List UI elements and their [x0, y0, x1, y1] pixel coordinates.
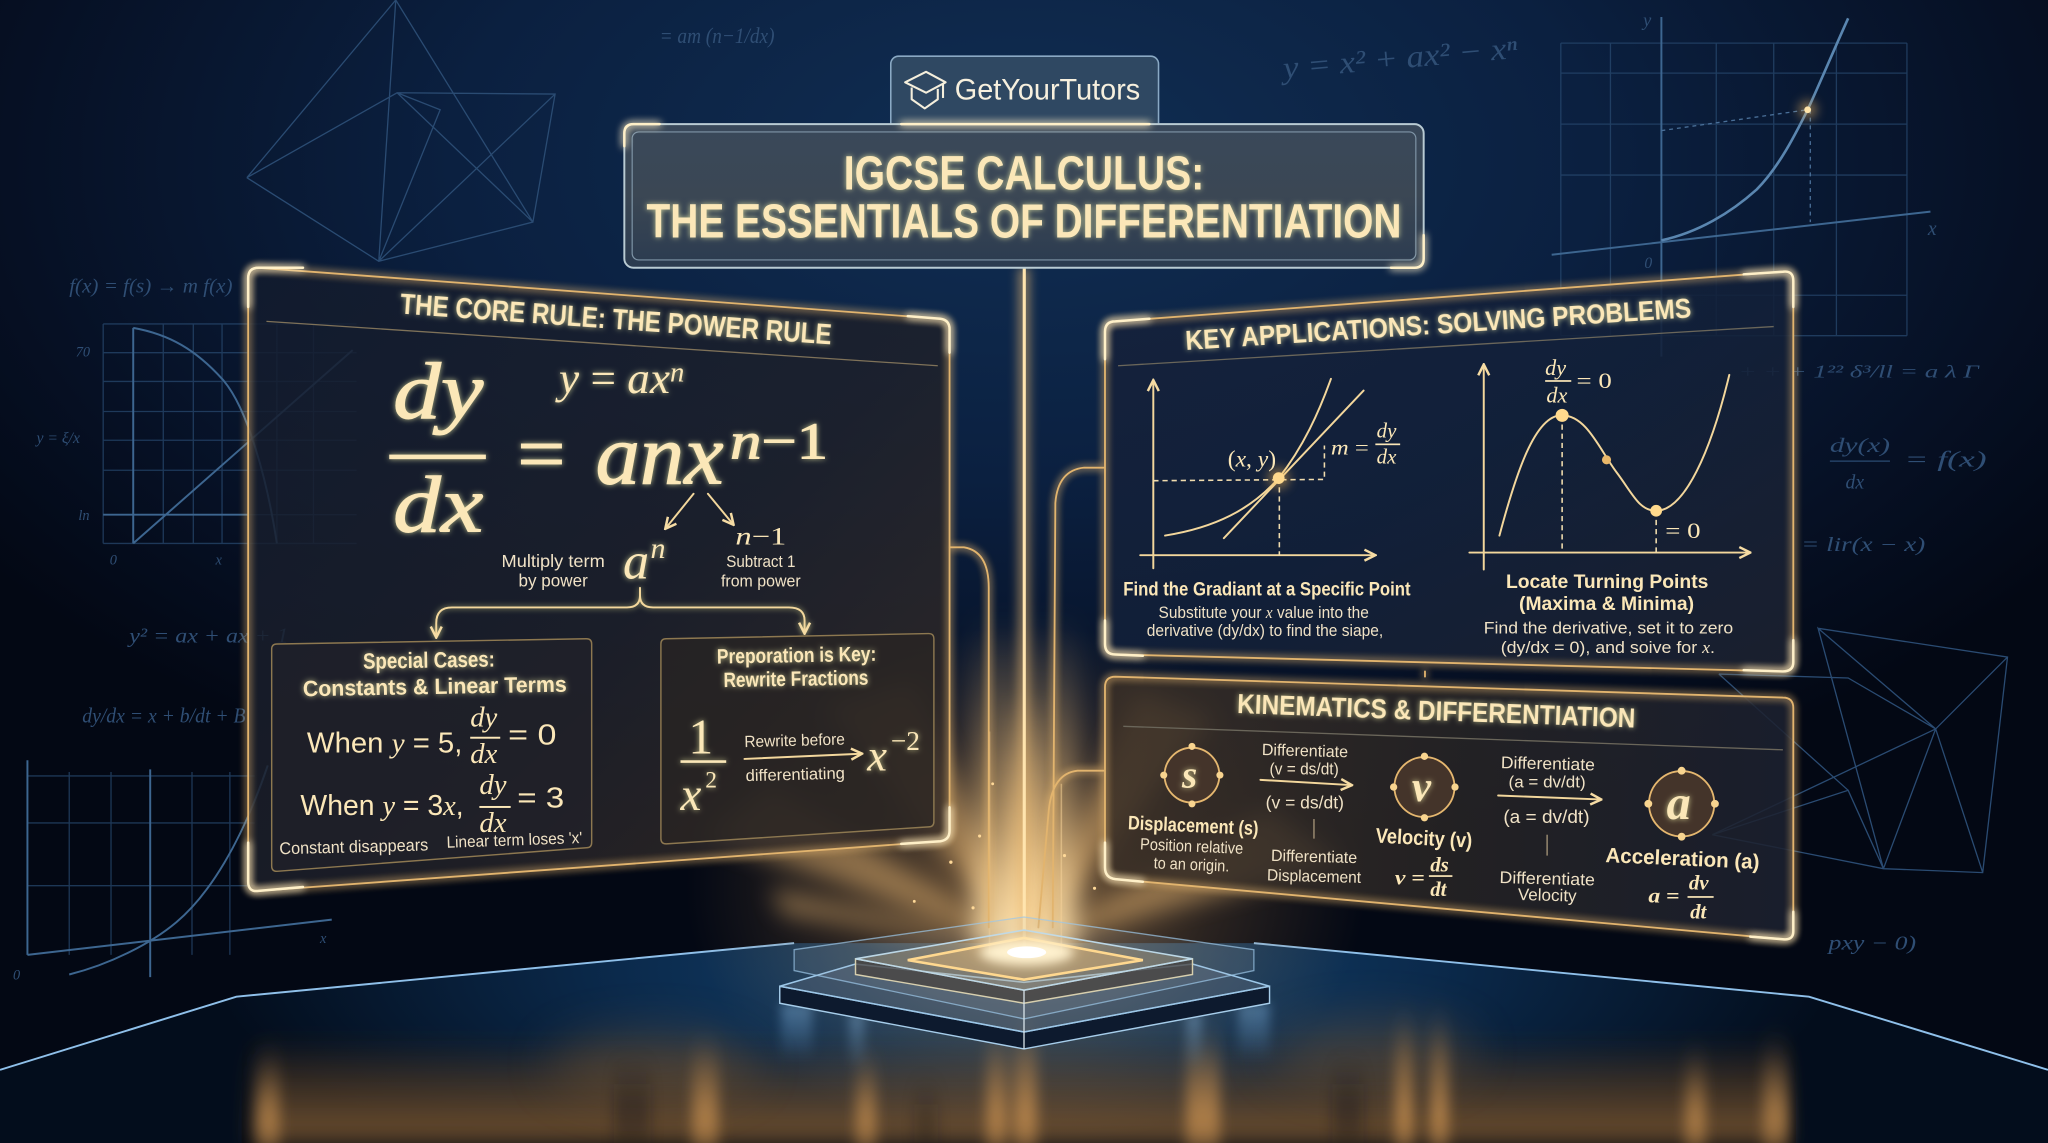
- breakdown arrows: [666, 494, 733, 528]
- a to the n: a: [623, 533, 649, 591]
- acceleration label: dt: [1690, 899, 1708, 923]
- velocity label: [1375, 825, 1473, 901]
- displacement label: Position relative: [1140, 835, 1244, 858]
- turning points caption: (Maxima & Minima): [1519, 594, 1694, 615]
- heading: kinematics: KINEMATICS & DIFFERENTIATION: [1237, 688, 1636, 734]
- acceleration label: a =: [1648, 884, 1680, 908]
- arrow: s to v: [1260, 741, 1362, 887]
- sub panel: rewrite fractions: Rewrite before: [744, 731, 845, 751]
- chart: turning points: [1469, 355, 1749, 570]
- acceleration label: Acceleration (a): [1605, 844, 1760, 874]
- main formula: n−1: [730, 413, 828, 471]
- subtract note: from power: [721, 573, 801, 591]
- sub panel: rewrite fractions: Preporation is Key:: [717, 643, 876, 669]
- floor reflections: [242, 1003, 1796, 1143]
- right formulas: + + + 1²² δ³/ll = a λ Γ: [1738, 362, 1980, 382]
- sub panel: rewrite fractions: 1: [688, 710, 713, 765]
- icon: velocity: [1390, 753, 1459, 821]
- chart: turning points: = 0: [1576, 368, 1612, 393]
- velocity label: v =: [1395, 865, 1425, 889]
- particles: [913, 782, 1096, 909]
- arrow: s to v: (v = ds/dt): [1266, 793, 1344, 813]
- turning points caption: (dy/dx = 0), and soive for x.: [1501, 638, 1715, 657]
- chart: turning points: = 0: [1665, 518, 1701, 543]
- heading: key applications: KEY APPLICATIONS: SOLVING PROBLEMS: [1184, 292, 1692, 356]
- arrow: v to a: (a = dv/dt): [1509, 773, 1586, 792]
- sub panel: rewrite fractions: [661, 634, 934, 844]
- base plate: [780, 986, 1270, 1049]
- icon: displacement: [1160, 743, 1223, 807]
- background math decorations: y = ξ/x: [35, 430, 80, 447]
- icon: acceleration: a: [1667, 777, 1691, 830]
- logo tab: [891, 56, 1159, 132]
- central connector line: [989, 268, 1062, 954]
- brand name: GetYourTutors: [955, 73, 1140, 106]
- when y equals 5: When y = 5,: [307, 727, 462, 759]
- when y equals 3x: When y = 3x,: [300, 790, 464, 822]
- main formula: y = ax: [555, 353, 670, 403]
- background math decorations: x: [215, 552, 223, 568]
- when y equals 3x: [300, 769, 564, 839]
- turning points caption: [1484, 572, 1733, 657]
- rewrite arrow: [744, 754, 861, 759]
- when y equals 3x: dx: [479, 807, 507, 839]
- arrow: s to v: Differentiate: [1271, 847, 1357, 867]
- a to the n: [623, 532, 665, 591]
- sub panel: rewrite fractions: Rewrite Fractions: [723, 667, 869, 692]
- turning points caption: Locate Turning Points: [1506, 572, 1708, 593]
- displacement label: to an origin.: [1153, 854, 1230, 876]
- background math decorations: f(x) = f(s) → m f(x): [69, 277, 232, 298]
- icon: velocity: v: [1412, 764, 1432, 811]
- icon: displacement: s: [1181, 754, 1197, 797]
- top right graph: 0: [1644, 255, 1652, 272]
- displacement label: [1126, 812, 1259, 877]
- floor: [0, 943, 2048, 1143]
- sub panel: rewrite fractions: −2: [891, 726, 920, 756]
- displacement label: Displacement (s): [1127, 812, 1259, 840]
- sub panel: special cases: Constants & Linear Terms: [303, 672, 567, 701]
- arrow: s to v: (v = ds/dt): [1270, 761, 1339, 779]
- sub panel: special cases: Special Cases:: [363, 647, 495, 674]
- subtract note: n−1: [735, 524, 786, 551]
- multiply note: [502, 551, 605, 591]
- acceleration label: dv: [1689, 871, 1709, 895]
- bottom left graph: [13, 760, 332, 984]
- background math decorations: ln: [78, 508, 90, 524]
- icon: graduation cap: [905, 72, 946, 108]
- multiply note: by power: [519, 571, 588, 591]
- gradient caption: derivative (dy/dx) to find the siape,: [1147, 622, 1383, 640]
- back glass: [794, 917, 1254, 1019]
- top right graph: y: [1641, 10, 1652, 30]
- arrow: v to a: [1498, 753, 1600, 906]
- velocity label: Velocity (v): [1375, 825, 1473, 853]
- gradient caption: Find the Gradiant at a Specific Point: [1123, 580, 1411, 601]
- arrow: v to a: Differentiate: [1499, 868, 1595, 890]
- main formula: dy: [393, 346, 483, 436]
- main formula: =: [517, 409, 566, 499]
- arrow: s to v: Displacement: [1267, 866, 1362, 887]
- chart: turning points: dx: [1546, 382, 1568, 407]
- main formula: [389, 346, 828, 550]
- bottom left graph: 0: [13, 968, 20, 984]
- background math decorations: pxy − 0): [1826, 934, 1916, 955]
- chart: gradient at a point: dy: [1377, 419, 1397, 443]
- connectors to panels: [950, 468, 1425, 927]
- gradient caption: Substitute your x value into the: [1159, 603, 1369, 622]
- background math decorations: = f(x): [1904, 446, 1987, 471]
- background math decorations: = am (n−1/dx): [660, 23, 775, 48]
- panel: the power rule: [248, 268, 950, 891]
- when y equals 5: = 0: [508, 720, 556, 752]
- panel: key applications: [1105, 272, 1793, 671]
- chart: gradient at a point: (x, y): [1228, 446, 1276, 472]
- main formula: n: [670, 356, 684, 388]
- when y equals 5: [307, 701, 556, 770]
- background math decorations: dy(x): [1830, 436, 1890, 457]
- bottom left graph: x: [319, 931, 327, 947]
- sub panel: special cases: [272, 639, 592, 871]
- title text: [647, 146, 1401, 249]
- title text: THE ESSENTIALS OF DIFFERENTIATION: [647, 195, 1401, 249]
- multiply note: Multiply term: [502, 551, 605, 571]
- left graph: [103, 324, 357, 543]
- icon: acceleration: [1644, 767, 1719, 841]
- glass pedestal: [780, 917, 1270, 1049]
- notes: [279, 829, 583, 858]
- gradient caption: [1123, 580, 1411, 640]
- chart: gradient at a point: [1140, 379, 1400, 568]
- sub panel: rewrite fractions: x: [866, 731, 887, 781]
- glowing diamond: [908, 938, 1143, 980]
- right wireframe: [1712, 628, 2008, 873]
- sub panel: rewrite fractions: x: [679, 769, 701, 821]
- floor edge lines: [0, 943, 2048, 1070]
- notes: Constant disappears: [279, 835, 428, 858]
- acceleration label: [1605, 844, 1760, 923]
- chart: turning points: dy: [1545, 355, 1566, 380]
- arrow: v to a: Differentiate: [1501, 753, 1595, 775]
- title panel: [624, 124, 1424, 268]
- velocity label: ds: [1430, 852, 1449, 876]
- notes: Linear term loses 'x': [446, 829, 583, 852]
- background math decorations: 70: [76, 345, 90, 361]
- background math decorations: y² = ax + ax + 1: [127, 624, 289, 648]
- main formula: anx: [596, 406, 724, 502]
- subtract note: Subtract 1: [726, 553, 795, 571]
- top right graph: x: [1927, 219, 1937, 240]
- chart: gradient at a point: dx: [1377, 445, 1397, 469]
- middle plate: [856, 959, 1192, 1003]
- turning points caption: Find the derivative, set it to zero: [1484, 619, 1733, 638]
- background math decorations: dx: [1846, 473, 1864, 494]
- arrow: s to v: Differentiate: [1262, 741, 1348, 761]
- wireframe pyramid: [247, 0, 555, 261]
- a to the n: n: [650, 532, 665, 565]
- main formula: dx: [393, 460, 483, 550]
- when y equals 3x: dy: [479, 769, 507, 801]
- top right graph: [1552, 10, 1937, 357]
- heading: power rule: THE CORE RULE: THE POWER RULE: [399, 289, 833, 351]
- formula top: y = x² + ax² − xⁿ: [1278, 30, 1519, 86]
- background math decorations: 0: [110, 552, 117, 568]
- title text: IGCSE CALCULUS:: [844, 146, 1204, 200]
- panel: kinematics: [1105, 677, 1793, 939]
- branching arrows: [436, 588, 805, 636]
- chart: gradient at a point: m =: [1331, 436, 1369, 460]
- when y equals 5: dy: [470, 701, 498, 733]
- sub panel: rewrite fractions: 2: [705, 768, 717, 794]
- arrow: v to a: Velocity: [1518, 885, 1577, 906]
- velocity label: dt: [1430, 877, 1448, 901]
- when y equals 3x: = 3: [517, 782, 564, 814]
- subtract note: [721, 524, 801, 591]
- arrow: v to a: (a = dv/dt): [1503, 806, 1590, 827]
- light rays from pedestal: [686, 614, 1365, 1143]
- background math decorations: dy/dx = x + b/dt + B: [82, 703, 246, 727]
- background math decorations: = lir(x − x): [1801, 535, 1925, 556]
- when y equals 5: dx: [470, 738, 498, 770]
- sub panel: rewrite fractions: differentiating: [745, 765, 845, 785]
